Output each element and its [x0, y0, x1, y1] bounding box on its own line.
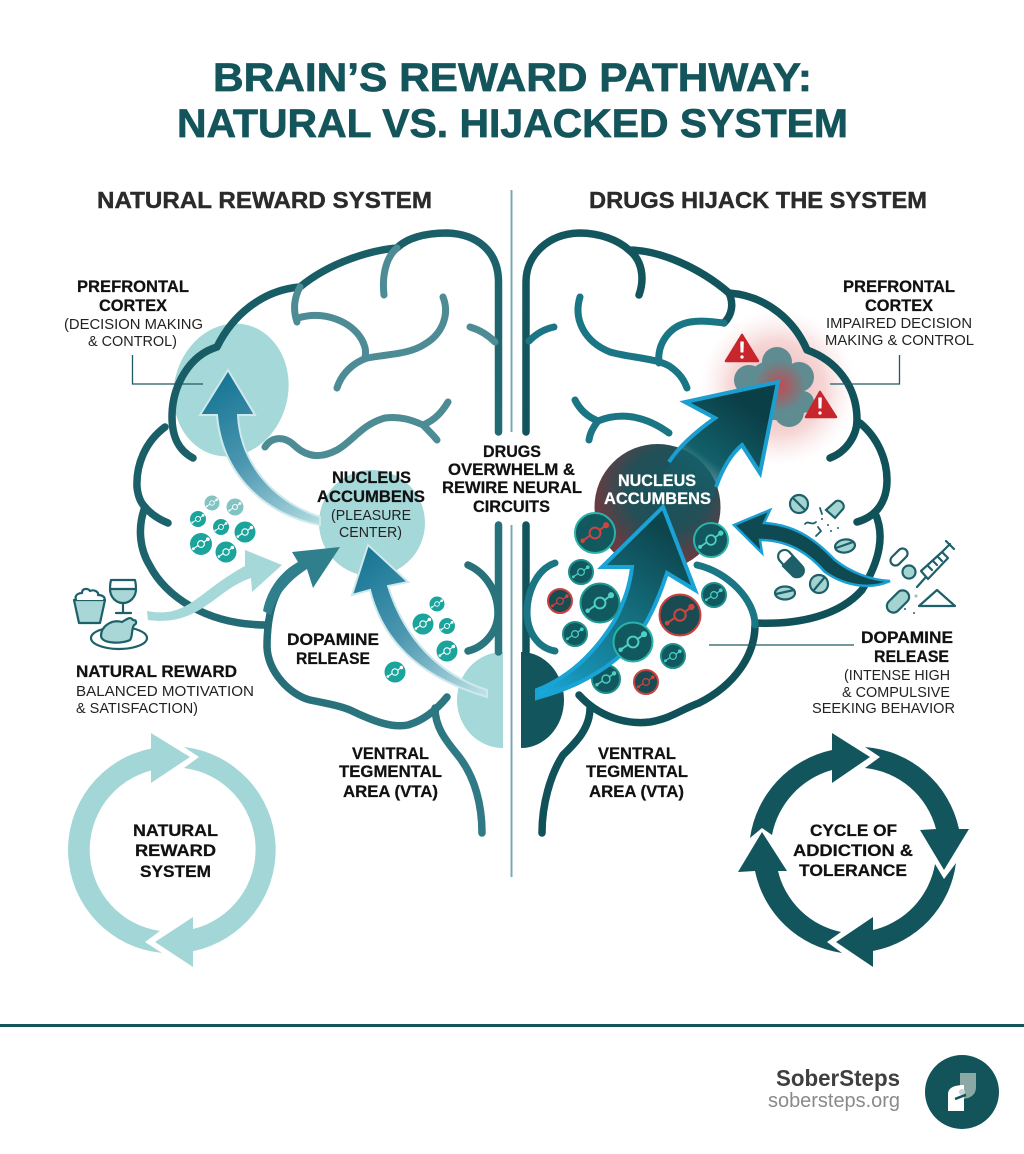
label: nucleus accumbens natural: NUCLEUS	[332, 469, 411, 487]
label: prefrontal cortex hijacked: MAKING & CONTROL	[825, 332, 974, 349]
label: prefrontal cortex natural: PREFRONTAL	[77, 278, 189, 296]
cycle label hijacked	[793, 822, 913, 880]
label: natural reward	[76, 663, 254, 717]
arrow: VTA to nucleus, hijacked	[537, 507, 695, 698]
label: dopamine release hijacked: DOPAMINE	[861, 629, 953, 647]
label: VTA hijacked	[586, 745, 688, 801]
label: nucleus accumbens hijacked	[604, 472, 711, 508]
nucleus accumbens dark circle	[594, 444, 720, 570]
cycle arrows hijacked	[738, 733, 969, 967]
label: nucleus accumbens natural: CENTER)	[339, 524, 402, 541]
dopamine molecules: natural	[190, 496, 458, 682]
cycle: addiction and tolerance	[738, 733, 969, 967]
VTA dark half circle	[521, 652, 564, 748]
label: dopamine release hijacked: SEEKING BEHAVIOR	[812, 700, 955, 717]
footer logo	[925, 1055, 999, 1129]
label: dopamine release hijacked: RELEASE	[874, 648, 949, 666]
label: natural reward: & SATISFACTION)	[76, 700, 198, 717]
label: nucleus accumbens natural	[317, 469, 425, 541]
cycle label natural	[133, 822, 218, 881]
label: prefrontal cortex hijacked: PREFRONTAL	[843, 278, 955, 296]
title: BRAIN’S REWARD PATHWAY:	[213, 56, 812, 100]
label: dopamine release hijacked	[812, 629, 955, 717]
icon: warning triangles	[726, 335, 836, 417]
cycle label natural: REWARD	[135, 842, 216, 860]
label: VTA natural: TEGMENTAL	[339, 763, 442, 781]
heading: natural reward system: NATURAL REWARD SYSTEM	[97, 187, 432, 213]
cycle label hijacked: TOLERANCE	[799, 862, 907, 880]
label: dopamine release hijacked: & COMPULSIVE	[842, 684, 950, 701]
arrow: VTA to nucleus	[352, 545, 487, 697]
cycle arrows natural	[68, 733, 276, 967]
icon: drugs outside brain	[884, 541, 955, 615]
arrow: drugs to nucleus	[734, 510, 890, 586]
label: nucleus accumbens natural: ACCUMBENS	[317, 488, 425, 506]
label: VTA natural: VENTRAL	[352, 745, 429, 763]
label: nucleus accumbens hijacked: NUCLEUS	[618, 472, 696, 490]
arrow: dopamine to nucleus	[263, 547, 340, 615]
label: center callout: DRUGS	[483, 443, 541, 461]
title: NATURAL VS. HIJACKED SYSTEM	[177, 102, 848, 146]
label: center callout: REWIRE NEURAL	[442, 479, 582, 497]
label: dopamine release natural: DOPAMINE	[287, 631, 379, 649]
prefrontal cortex highlight	[159, 311, 303, 469]
footer brand text: SoberSteps	[776, 1065, 900, 1091]
label: center callout	[442, 443, 582, 516]
label: nucleus accumbens natural: (PLEASURE	[331, 507, 411, 524]
cycle label natural: NATURAL	[133, 822, 218, 840]
label: dopamine release hijacked: (INTENSE HIGH	[844, 667, 950, 684]
label: VTA hijacked: VENTRAL	[598, 745, 676, 763]
panel: natural brain	[137, 233, 503, 833]
footer rule	[0, 1024, 1024, 1027]
label: prefrontal cortex hijacked: CORTEX	[865, 297, 933, 315]
label: nucleus accumbens hijacked: ACCUMBENS	[604, 490, 711, 508]
label: VTA hijacked: AREA (VTA)	[589, 783, 684, 801]
arrow: nucleus to prefrontal, hijacked	[655, 382, 778, 500]
panel: hijacked brain	[521, 233, 890, 833]
footer brand text: sobersteps.org	[768, 1090, 900, 1112]
label: dopamine release natural	[287, 631, 379, 668]
title	[177, 56, 848, 146]
label: prefrontal cortex hijacked: IMPAIRED DECISION	[826, 315, 972, 332]
label: center callout: OVERWHELM &	[448, 461, 575, 479]
label: natural reward: BALANCED MOTIVATION	[76, 683, 254, 700]
VTA half circle	[457, 652, 503, 748]
prefrontal glow	[700, 310, 856, 466]
icon: pills inside brain	[775, 495, 856, 600]
brain outline: natural	[137, 233, 499, 833]
icon: natural rewards food and drink	[74, 580, 147, 649]
label: VTA natural: AREA (VTA)	[343, 783, 438, 801]
label: prefrontal cortex natural: CORTEX	[99, 297, 167, 315]
cycle label hijacked: CYCLE OF	[810, 822, 897, 840]
dopamine molecules: hijacked	[548, 513, 728, 694]
heading: drugs hijack the system: DRUGS HIJACK THE SYSTEM	[589, 187, 927, 213]
label: prefrontal cortex natural	[64, 278, 203, 350]
label: VTA hijacked: TEGMENTAL	[586, 763, 688, 781]
label: prefrontal cortex natural: (DECISION MAKING	[64, 316, 203, 333]
smoke cloud	[734, 347, 814, 427]
arrow: nucleus to prefrontal cortex	[200, 370, 320, 525]
smoke red core	[754, 360, 806, 412]
label: dopamine release natural: RELEASE	[296, 650, 370, 668]
label: center callout: CIRCUITS	[473, 498, 550, 516]
cycle: natural reward system	[68, 733, 276, 967]
label: prefrontal cortex natural: & CONTROL)	[88, 333, 177, 350]
label: VTA natural	[339, 745, 442, 801]
arrow: natural reward to nucleus	[147, 550, 282, 621]
brain outline: hijacked	[526, 233, 887, 833]
label: prefrontal cortex hijacked	[825, 278, 974, 349]
nucleus accumbens circle	[319, 470, 425, 576]
footer brand text	[768, 1065, 900, 1112]
cycle label natural: SYSTEM	[140, 863, 211, 881]
label: natural reward: NATURAL REWARD	[76, 663, 237, 681]
cycle label hijacked: ADDICTION &	[793, 842, 913, 860]
